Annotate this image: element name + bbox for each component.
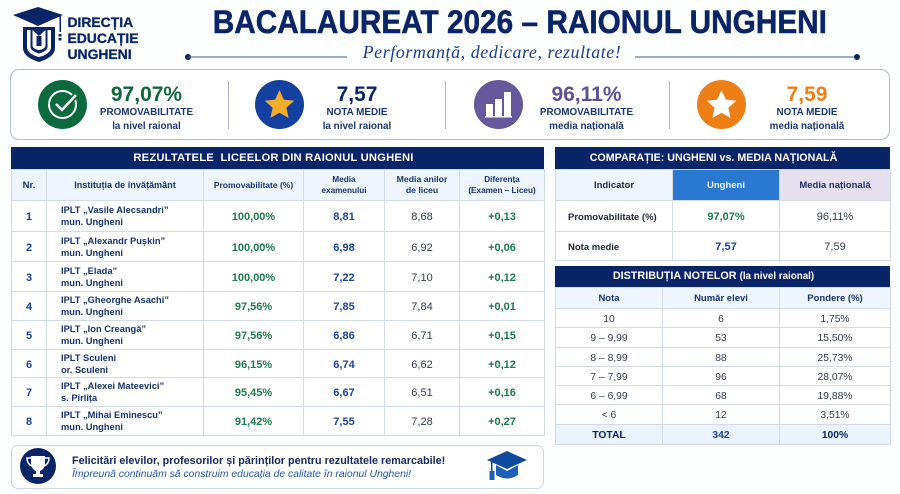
table: high school results: 8,81 — [333, 211, 355, 223]
table: high school results: 6,51 — [411, 387, 433, 399]
table: high school results: 6,67 — [333, 387, 355, 399]
table: grade distribution: 6 — [718, 314, 724, 324]
table: high school results: 1 — [26, 211, 32, 223]
table: high school results: examenului — [321, 186, 367, 195]
table: grade distribution: 88 — [715, 352, 727, 364]
table: grade distribution: 12 — [715, 410, 727, 421]
heading: grade distribution: DISTRIBUȚIA NOTELOR (la nivel raional) — [613, 270, 814, 282]
icon: trophy — [20, 448, 56, 484]
heading: comparison: COMPARAȚIE: UNGHENI vs. MEDIA NAȚIONALĂ — [590, 152, 837, 164]
table: high school results: 7,55 — [333, 416, 355, 428]
label: la nivel raional — [323, 121, 391, 132]
logo text: EDUCAȚIE — [68, 30, 138, 46]
panel: comparison — [555, 147, 891, 261]
label — [323, 107, 391, 132]
table: high school results: mun. Ungheni — [61, 422, 123, 432]
icon: bar chart — [474, 80, 523, 129]
heading: results table: REZULTATELE LICEELOR DIN RAIONUL UNGHENI — [133, 152, 414, 164]
label: media națională — [549, 121, 624, 132]
label: la nivel raional — [112, 121, 181, 132]
table: high school results: IPLT „Vasile Alecsandri” — [61, 205, 168, 215]
table: high school results: de liceu — [406, 185, 438, 195]
label: media națională — [770, 121, 844, 132]
table: high school results: IPLT „Alexei Mateevici” — [61, 381, 164, 391]
table: grade distribution: 8 – 8,99 — [590, 352, 628, 364]
table: high school results: +0,27 — [488, 416, 516, 428]
table: high school results: 6,74 — [333, 358, 355, 370]
table: grade distribution: Nota — [598, 292, 620, 304]
logo: Direcția Educație Ungheni — [13, 7, 138, 62]
table: Ungheni vs national: 7,57 — [715, 241, 737, 253]
table: high school results: 6,86 — [333, 330, 355, 342]
table: high school results: +0,12 — [488, 358, 516, 370]
table: high school results: Instituția de învățământ — [74, 180, 176, 190]
table: high school results: +0,13 — [488, 211, 516, 223]
table: high school results: 5 — [26, 330, 32, 342]
table: high school results: 97,56% — [235, 301, 272, 313]
table: high school results: 6,71 — [411, 330, 433, 342]
table: grade distribution — [555, 287, 891, 445]
table: high school results: 7,10 — [411, 272, 433, 284]
table: grade distribution: 96 — [715, 372, 727, 382]
message line 1: Felicitări elevilor, profesorilor și părinților pentru rezultatele remarcabile! — [72, 455, 445, 467]
panel: results table — [11, 147, 545, 436]
KPI: promovabilitate raion — [38, 80, 193, 132]
table: high school results: +0,16 — [488, 387, 516, 399]
table: high school results: or. Sculeni — [61, 364, 108, 374]
message line 2: Împreună continuăm să construim educația de calitate în raionul Ungheni! — [72, 469, 411, 480]
table: high school results: (Examen – Liceu) — [468, 186, 536, 195]
table: high school results: 7,85 — [333, 301, 355, 313]
table: high school results: mun. Ungheni — [61, 307, 123, 317]
logo text: DIRECȚIA — [68, 14, 133, 30]
table: high school results: 6,62 — [411, 358, 433, 370]
table: grade distribution: Număr elevi — [694, 292, 748, 304]
table: high school results: 97,56% — [235, 330, 272, 342]
label: NOTA MEDIE — [777, 107, 837, 118]
panel: congratulations footer — [11, 445, 544, 489]
table: Ungheni vs national: Nota medie — [568, 242, 619, 252]
heading: grade distribution — [555, 266, 890, 287]
KPI: nota medie raion — [255, 80, 391, 132]
table: high school results: 100,00% — [232, 242, 275, 254]
table: grade distribution: 10 — [603, 314, 615, 324]
table: high school results — [11, 169, 545, 436]
KPI: promovabilitate națională — [474, 80, 633, 132]
panel: grade distribution — [555, 266, 891, 445]
value: 96,11% — [551, 83, 622, 106]
table: grade distribution: 7 – 7,99 — [590, 372, 628, 382]
table: grade distribution: 68 — [715, 390, 727, 402]
table: grade distribution: < 6 — [602, 410, 616, 421]
table: high school results: IPLT „Alexandr Pușkin” — [61, 236, 165, 246]
table: high school results: Diferența — [484, 175, 520, 184]
label: NOTA MEDIE — [327, 107, 387, 118]
value: 7,57 — [337, 83, 377, 106]
label — [100, 107, 193, 132]
table: high school results: 3 — [26, 272, 32, 284]
table: Ungheni vs national: 7,59 — [824, 241, 846, 253]
table: grade distribution: TOTAL — [592, 430, 626, 441]
table: high school results: 8 — [26, 416, 32, 428]
label — [770, 107, 844, 132]
table: grade distribution: 28,07% — [818, 372, 852, 382]
table: high school results: +0,06 — [488, 242, 516, 254]
logo text — [68, 14, 138, 62]
decorative line right — [635, 54, 860, 60]
table: high school results: IPLT Sculeni — [61, 352, 116, 362]
table: high school results: 100,00% — [232, 272, 275, 284]
label: PROMOVABILITATE — [100, 107, 193, 118]
table: grade distribution: 15,50% — [818, 333, 852, 344]
table: high school results: +0,12 — [488, 272, 516, 284]
table: high school results: 7 — [26, 387, 32, 399]
table: high school results: 91,42% — [235, 416, 272, 428]
table: Ungheni vs national: Ungheni — [707, 180, 745, 190]
label — [540, 107, 633, 132]
table: high school results: IPLT „Ion Creangă” — [61, 324, 146, 334]
table: high school results: IPLT „Mihai Eminescu” — [61, 410, 163, 420]
table: Ungheni vs national: Promovabilitate (%) — [568, 212, 657, 222]
table: Ungheni vs national — [555, 169, 891, 261]
icon: check circle — [38, 80, 87, 129]
table: grade distribution: 3,51% — [820, 410, 850, 421]
icon: graduation cap with U shield — [13, 7, 63, 62]
icon: graduation cap — [487, 451, 527, 480]
table: high school results: 95,45% — [235, 387, 272, 399]
table: high school results: 100,00% — [232, 211, 275, 223]
table: Ungheni vs national: Indicator — [594, 180, 634, 190]
table: Ungheni vs national: Media națională — [799, 180, 871, 190]
icon: white star — [697, 80, 746, 129]
message — [72, 455, 445, 480]
value: 7,59 — [787, 83, 827, 106]
table: high school results: mun. Ungheni — [61, 248, 123, 258]
table: high school results: mun. Ungheni — [61, 278, 123, 288]
label: PROMOVABILITATE — [540, 107, 633, 118]
logo text: UNGHENI — [68, 46, 132, 62]
table: high school results: Promovabilitate (%) — [214, 180, 293, 190]
table: high school results: 8,68 — [411, 211, 433, 223]
heading: comparison — [555, 147, 890, 169]
table: high school results: s. Pîrlița — [61, 393, 97, 403]
icon: gold star — [255, 80, 304, 129]
table: high school results: 6,98 — [333, 242, 355, 254]
table: high school results: 7,22 — [333, 272, 355, 284]
KPI: nota medie națională — [697, 80, 844, 132]
table: grade distribution: 1,75% — [820, 314, 850, 324]
table: grade distribution: 342 — [712, 430, 730, 441]
table: grade distribution: 6 – 6,99 — [590, 390, 628, 402]
table: high school results: 6,92 — [411, 242, 433, 254]
title: BACALAUREAT 2026 – RAIONUL UNGHENI — [212, 4, 826, 40]
table: high school results: IPLT „Gheorghe Asachi” — [61, 295, 169, 305]
heading: results table — [11, 147, 544, 169]
table: high school results: +0,01 — [488, 301, 516, 313]
table: Ungheni vs national: 96,11% — [817, 211, 853, 223]
panel: key indicators — [10, 69, 890, 140]
table: grade distribution: 25,73% — [818, 352, 852, 364]
table: high school results: mun. Ungheni — [61, 336, 123, 346]
table: high school results: 4 — [26, 301, 32, 313]
table: high school results: Media anilor — [397, 174, 447, 184]
table: high school results: 6 — [26, 358, 32, 370]
table: grade distribution: 9 – 9,99 — [590, 333, 628, 344]
table: high school results: Nr. — [23, 180, 35, 190]
table: grade distribution: 19,88% — [818, 390, 852, 402]
table: high school results: 96,15% — [235, 358, 272, 370]
table: high school results: IPLT „Elada” — [61, 266, 117, 276]
value: 97,07% — [111, 83, 182, 106]
table: grade distribution: Pondere (%) — [807, 292, 863, 304]
table: high school results: 7,84 — [411, 301, 433, 313]
table: high school results: 2 — [26, 242, 32, 254]
table: high school results: +0,15 — [488, 330, 516, 342]
subtitle: Performanță, dedicare, rezultate! — [363, 42, 621, 62]
table: grade distribution: 100% — [822, 430, 848, 441]
table: high school results: 7,28 — [411, 416, 433, 428]
table: Ungheni vs national: 97,07% — [707, 211, 745, 223]
table: grade distribution: 53 — [715, 333, 727, 344]
decorative line left — [185, 54, 347, 60]
table: high school results: Media — [332, 175, 356, 184]
table: high school results: mun. Ungheni — [61, 217, 123, 227]
